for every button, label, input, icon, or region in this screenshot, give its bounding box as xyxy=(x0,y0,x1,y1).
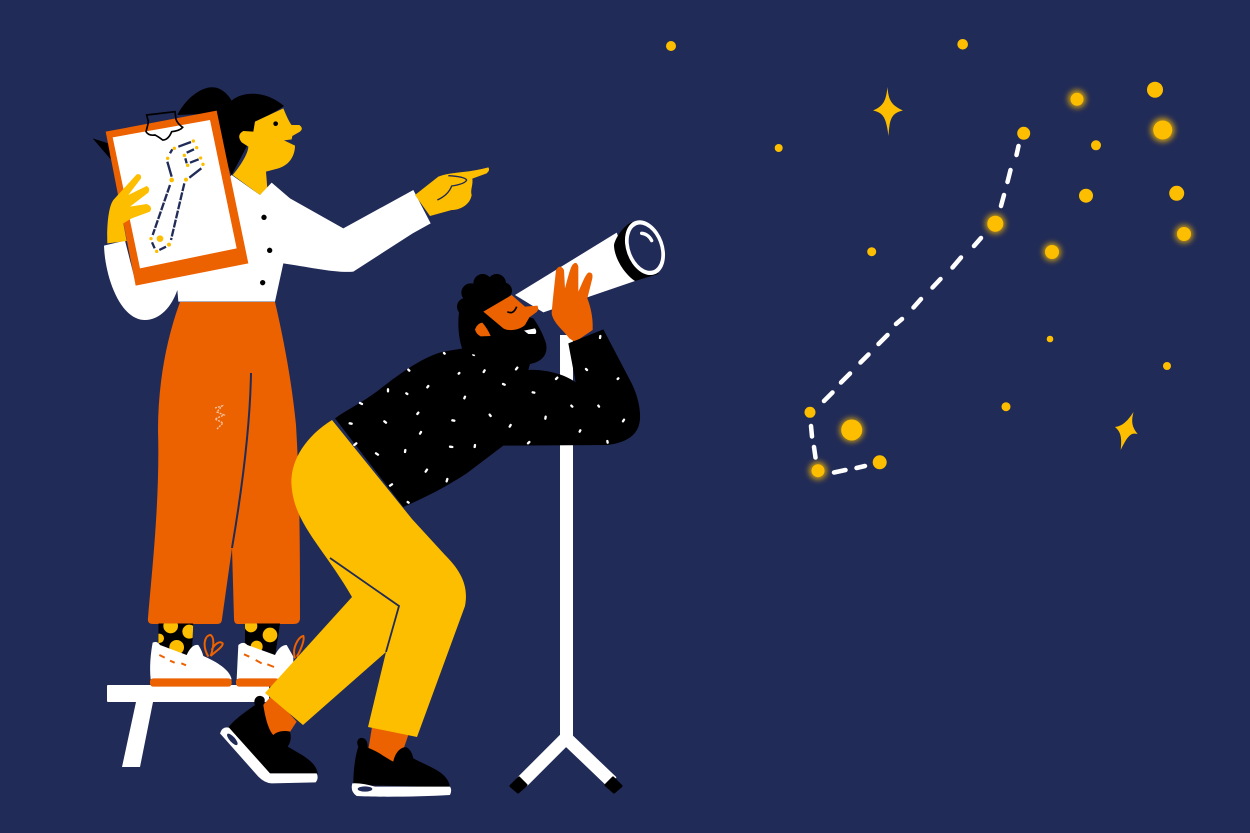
man: head xyxy=(457,274,546,364)
man: ear xyxy=(475,323,491,336)
clipboard clip xyxy=(146,112,183,140)
man: mouth xyxy=(524,328,536,334)
telescope xyxy=(515,215,672,312)
telescope stand xyxy=(511,335,621,792)
woman: ponytail tip xyxy=(93,138,111,159)
woman: trousers xyxy=(148,302,300,624)
man: curly hair xyxy=(457,274,512,315)
night sky stars and constellation xyxy=(666,39,1193,480)
woman: eye xyxy=(273,121,278,126)
sparkle star small xyxy=(1115,412,1138,450)
step stool xyxy=(107,685,269,767)
woman: fabric mark xyxy=(215,406,224,429)
clipboard xyxy=(106,111,248,286)
back shoe xyxy=(228,696,318,776)
star glows xyxy=(809,90,1193,480)
woman: shirt xyxy=(104,175,431,320)
man: trouser crease xyxy=(330,558,399,652)
man: socks and shoes xyxy=(220,695,451,797)
woman: socks and sneakers xyxy=(150,619,304,687)
woman: trouser crease xyxy=(232,373,251,548)
front shoe xyxy=(353,738,450,787)
man: sweater flecks xyxy=(350,336,624,503)
right sock xyxy=(245,624,280,655)
woman with clipboard xyxy=(93,87,489,687)
man looking through telescope xyxy=(220,263,640,797)
woman: hair xyxy=(177,87,284,175)
right sneaker xyxy=(237,643,293,679)
woman: upper body xyxy=(93,87,489,320)
woman: face and neck xyxy=(233,108,302,195)
left sneaker xyxy=(150,642,232,679)
back sock xyxy=(262,695,297,737)
woman: pointing hand xyxy=(415,167,489,216)
constellation dashed line xyxy=(811,146,1018,472)
man: eye xyxy=(507,307,517,313)
left sock xyxy=(158,624,194,655)
man: sweater xyxy=(335,329,640,507)
man: beard xyxy=(458,303,546,364)
man: face xyxy=(483,295,538,330)
front sock xyxy=(368,725,408,763)
woman: shirt buttons xyxy=(260,215,272,285)
woman: hand holding clipboard xyxy=(107,174,151,243)
stars xyxy=(666,39,1191,477)
man: trousers xyxy=(265,420,466,737)
man: raised hand xyxy=(552,263,593,342)
wrench constellation drawing xyxy=(149,139,205,253)
sparkle star large xyxy=(873,87,903,136)
